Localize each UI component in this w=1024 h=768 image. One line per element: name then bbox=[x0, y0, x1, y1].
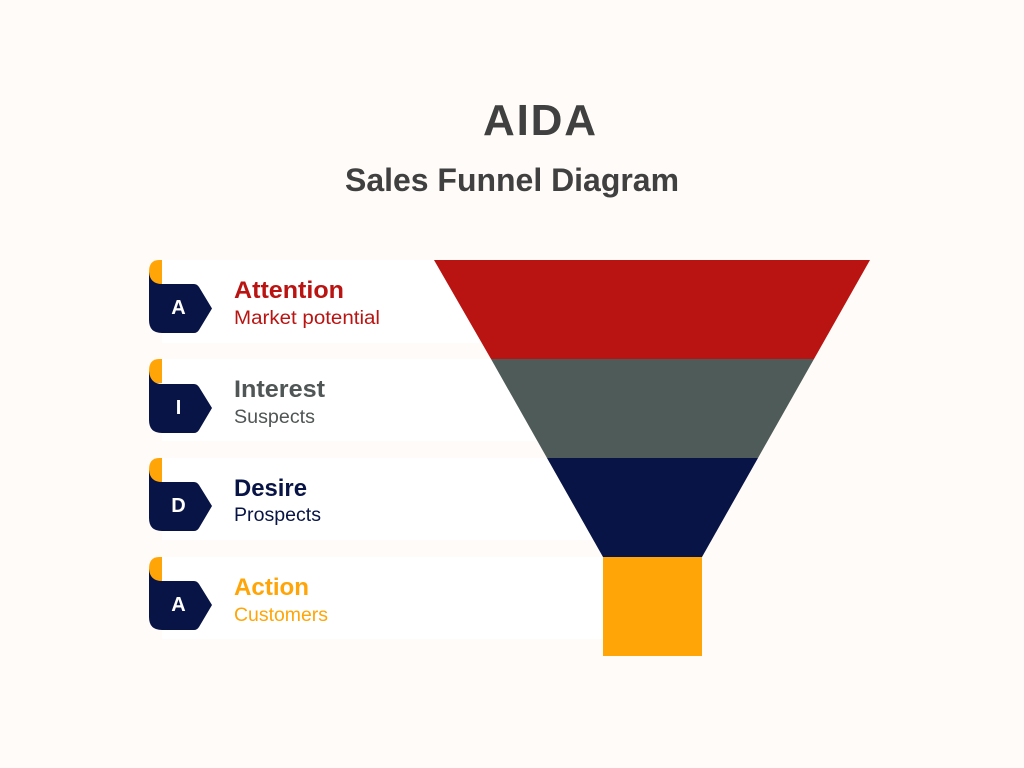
funnel segment: desire bbox=[547, 458, 758, 557]
icon: attention tab bbox=[149, 260, 212, 333]
icon: interest tab bbox=[149, 359, 212, 433]
icon: action tab: A bbox=[171, 594, 186, 616]
icon: desire tab: D bbox=[171, 495, 186, 517]
heading: interest: Interest bbox=[234, 376, 325, 403]
panel: action row bbox=[149, 557, 607, 639]
icon: interest tab: I bbox=[176, 397, 181, 419]
funnel segment: attention bbox=[434, 260, 870, 359]
icon: desire tab bbox=[149, 458, 212, 531]
icon: attention tab: A bbox=[171, 297, 186, 319]
funnel segment: interest bbox=[491, 359, 814, 458]
text: suspects: Suspects bbox=[234, 407, 315, 428]
text: market potential: Market potential bbox=[234, 308, 380, 329]
heading: action: Action bbox=[234, 574, 309, 601]
icon: action tab bbox=[149, 557, 212, 630]
funnel chart bbox=[434, 260, 870, 656]
panel: attention row bbox=[149, 260, 502, 343]
subtitle: Sales Funnel Diagram bbox=[345, 162, 679, 198]
heading: desire: Desire bbox=[234, 475, 307, 502]
panel: desire row bbox=[149, 458, 612, 540]
panel: interest row bbox=[149, 359, 562, 441]
title: AIDA bbox=[483, 96, 596, 145]
heading: attention: Attention bbox=[234, 277, 344, 304]
text: customers: Customers bbox=[234, 605, 328, 626]
text: prospects: Prospects bbox=[234, 505, 321, 526]
funnel segment: action bbox=[603, 557, 702, 656]
